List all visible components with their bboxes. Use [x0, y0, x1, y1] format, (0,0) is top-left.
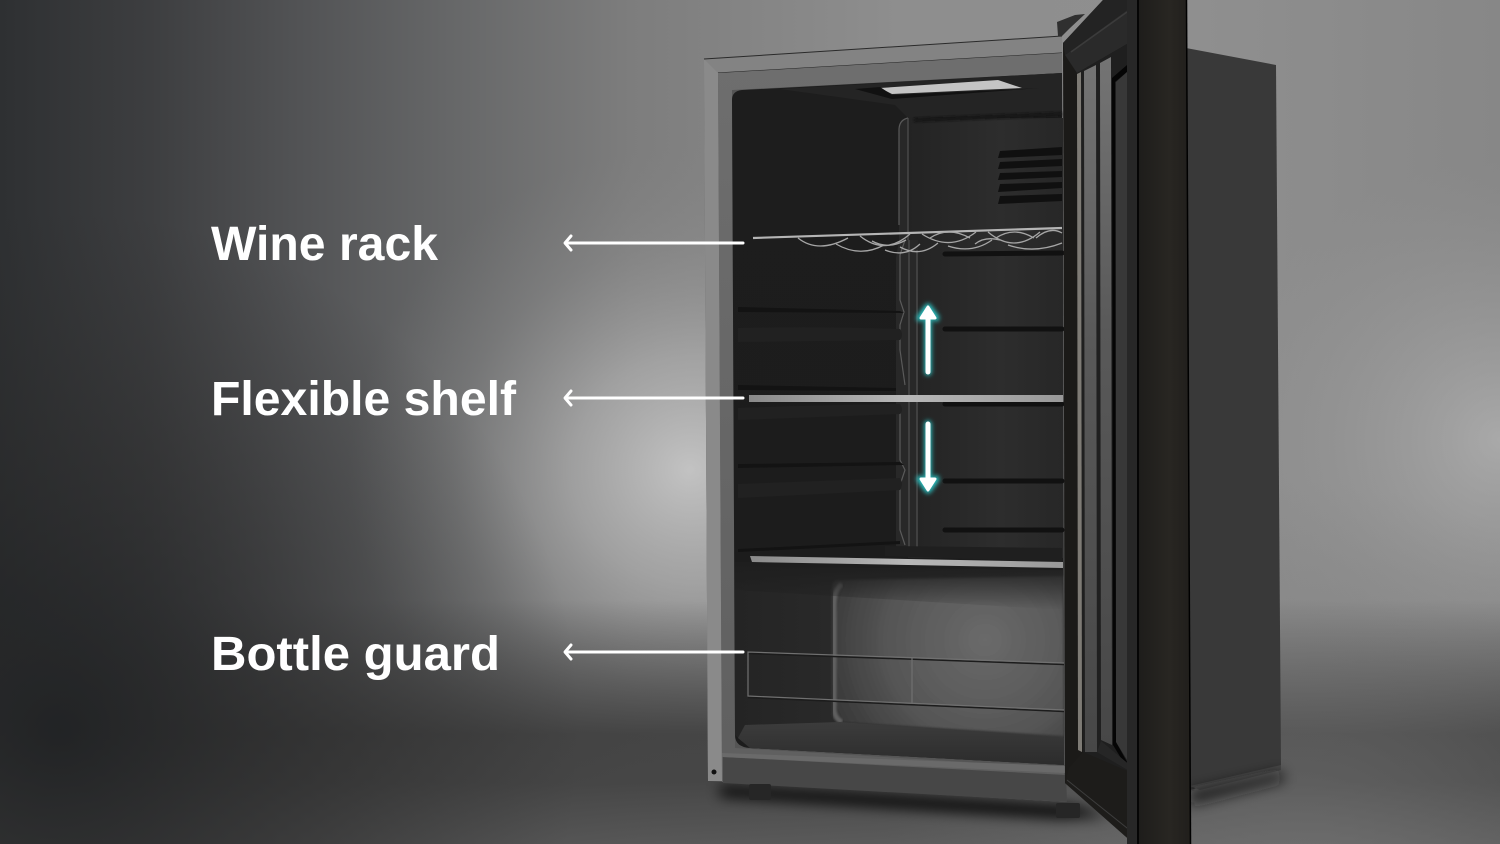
grey strip 2 — [1100, 57, 1112, 745]
door edge — [1139, 0, 1190, 844]
label: Flexible shelf: Flexible shelf — [211, 373, 517, 426]
arrow: Bottle guard — [565, 645, 743, 659]
arrow: shelf moves up — [920, 307, 936, 372]
label: Wine rack: Wine rack — [211, 218, 438, 271]
flexible shelf — [749, 395, 1063, 402]
hinge — [1057, 14, 1085, 36]
back shelf ledge — [885, 546, 1062, 562]
floor shadow right — [1190, 772, 1284, 804]
arrow: shelf moves down — [920, 424, 936, 490]
open door — [1063, 0, 1190, 844]
black glass edge — [1112, 65, 1127, 768]
interior — [732, 73, 1064, 765]
frame — [704, 36, 1067, 802]
side wall ribs — [738, 307, 904, 552]
light gasket strip — [1077, 72, 1082, 752]
arrow: Flexible shelf — [565, 391, 743, 405]
back wall — [908, 118, 1063, 558]
fridge front — [704, 36, 1067, 802]
top light — [880, 80, 1022, 94]
back wall top edge — [914, 114, 1062, 120]
textured frame flange — [704, 36, 1062, 781]
glass pane — [1116, 72, 1127, 760]
ceiling — [780, 73, 1062, 118]
door bottom bevel — [1065, 752, 1132, 842]
label: Bottle guard: Bottle guard — [211, 628, 500, 681]
side wall — [732, 73, 1064, 765]
floor shadow — [720, 786, 1110, 818]
corner strip — [896, 118, 918, 555]
lower shelf — [750, 556, 1063, 568]
vent slats — [998, 147, 1062, 204]
door inner surface — [1077, 44, 1127, 773]
feet — [749, 784, 1080, 818]
lower chamber — [735, 566, 1064, 765]
inner band — [718, 53, 1066, 802]
chamber floor — [738, 722, 1064, 765]
bottle guard — [748, 652, 1064, 712]
arrow: Wine rack — [565, 236, 743, 250]
wine rack — [753, 228, 1062, 253]
door frame — [1063, 0, 1190, 844]
back wall rails — [945, 253, 1062, 530]
upper bevel — [1065, 10, 1127, 73]
fridge cabinet side panel — [1186, 48, 1281, 790]
door side strip — [1127, 0, 1138, 844]
grey strip 1 — [1084, 65, 1097, 752]
